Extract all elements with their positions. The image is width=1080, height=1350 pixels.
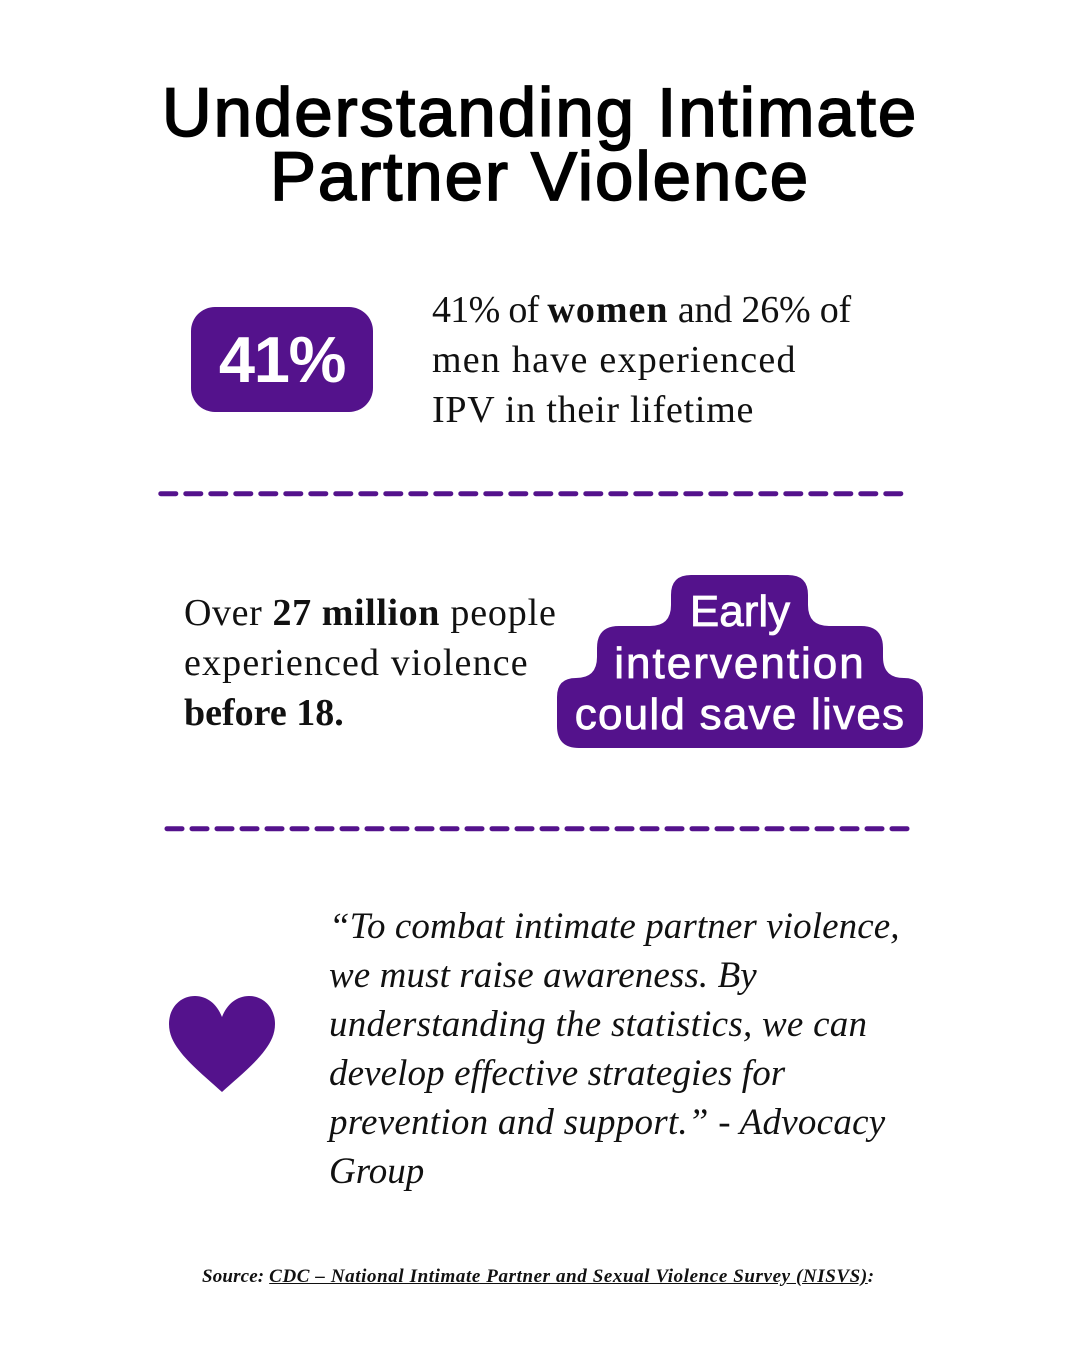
callout: early intervention: could save lives [575, 690, 905, 739]
quote [326, 906, 900, 1192]
text: childhood statistic [184, 592, 557, 734]
badge: 41% [191, 307, 373, 412]
callout: early intervention: Early [690, 587, 790, 636]
icon: heart [169, 996, 275, 1092]
source: Source: CDC – National Intimate Partner and Sexual Violence Survey (NISVS): [202, 1266, 874, 1287]
text: lifetime statistic: IPV in their lifetime [432, 389, 754, 431]
text: lifetime statistic: men have experienced [432, 339, 797, 381]
title: Partner Violence [270, 138, 810, 215]
text: lifetime statistic: 41% of women and 26% of [432, 289, 851, 331]
callout: early intervention [557, 575, 923, 748]
divider 1 [158, 491, 904, 496]
callout: early intervention: intervention [614, 638, 866, 688]
text: childhood statistic: experienced violence [184, 642, 529, 684]
quote: Group [329, 1151, 424, 1192]
quote: prevention and support.” - Advocacy [329, 1102, 885, 1143]
quote: we must raise awareness. By [329, 955, 757, 996]
badge: 41%: 41% [219, 323, 345, 396]
quote: develop effective strategies for [329, 1053, 785, 1094]
text: childhood statistic: Over 27 million people [184, 592, 557, 634]
text: lifetime statistic [432, 289, 852, 431]
title: Understanding Intimate [162, 74, 918, 151]
divider 2 [164, 826, 910, 832]
text: childhood statistic: before 18. [184, 692, 344, 734]
quote: understanding the statistics, we can [329, 1004, 867, 1045]
quote: “To combat intimate partner violence, [329, 906, 900, 947]
title [162, 74, 918, 215]
